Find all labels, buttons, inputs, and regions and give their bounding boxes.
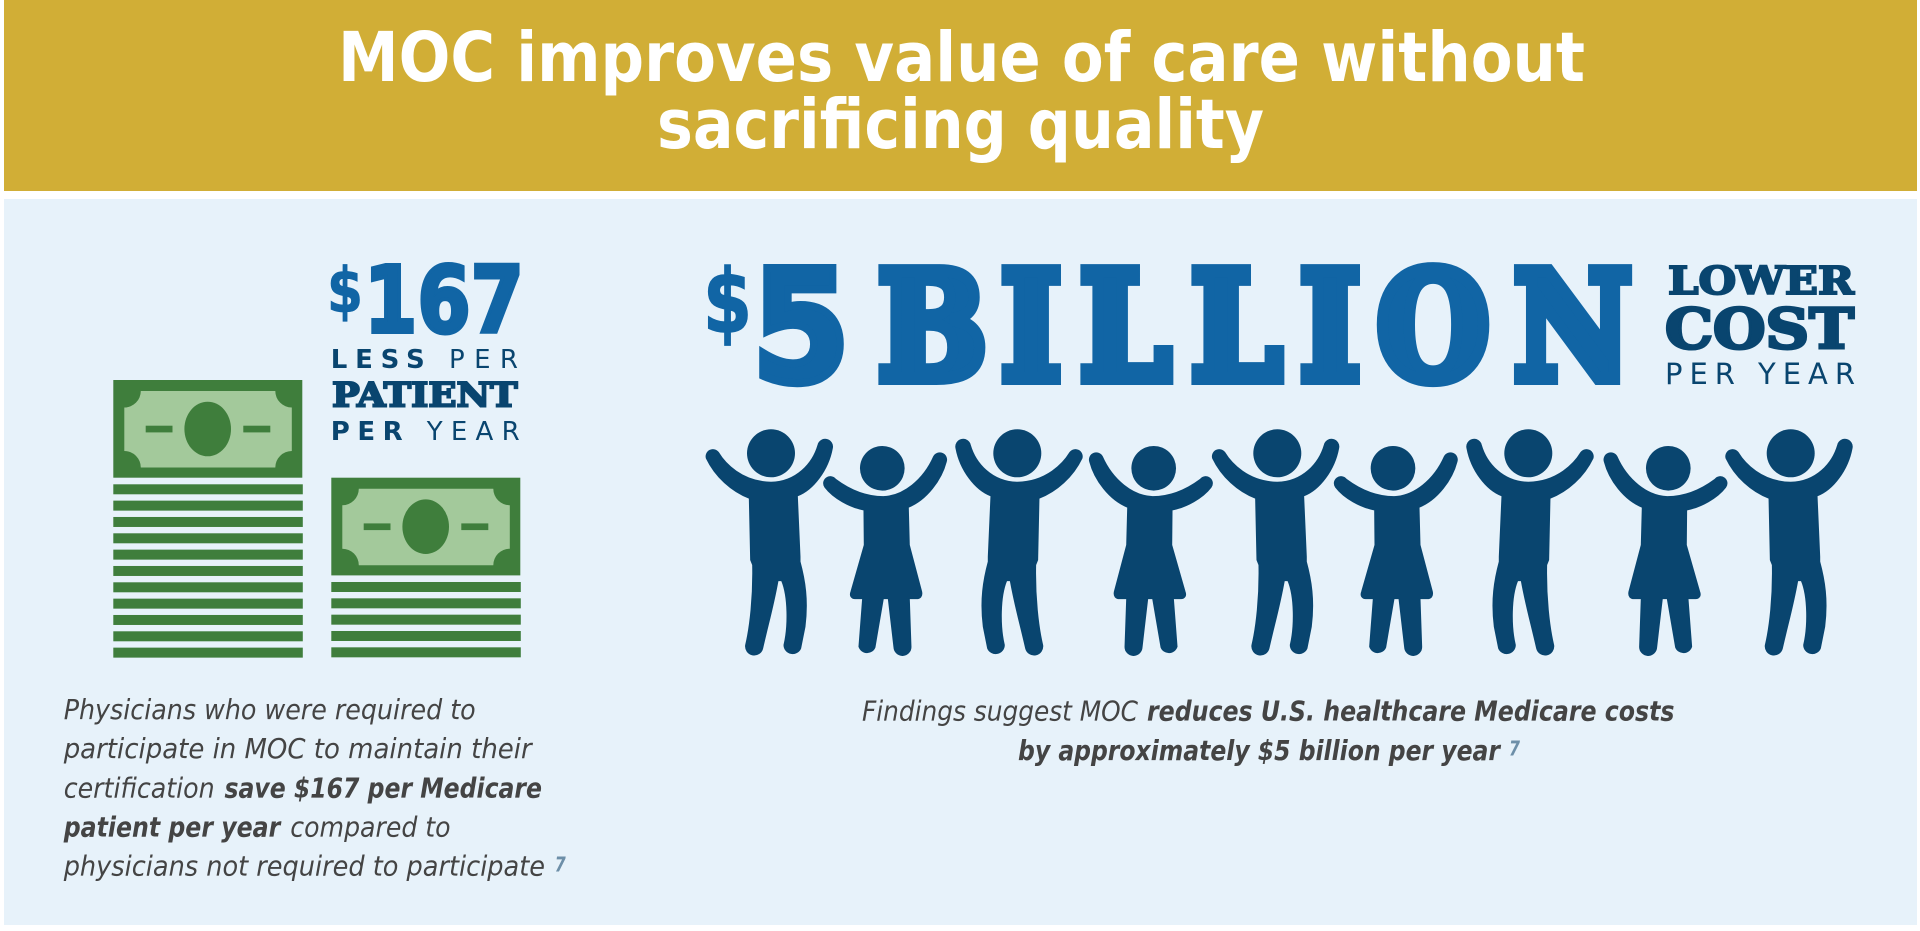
text block: physicians savings: participate in MOC to maintain their xyxy=(63,732,533,765)
stat: $5 billion: 5 xyxy=(752,237,850,418)
text block: Medicare costs finding: by approximately $5 billion per year xyxy=(1018,734,1502,767)
title: sacrificing quality xyxy=(657,85,1264,165)
text block: physicians savings xyxy=(63,693,566,882)
stat: lower cost per year: COST xyxy=(1665,296,1854,361)
stat: $167 less per patient per year: PATIENT xyxy=(332,376,518,416)
text block: physicians savings: Physicians who were required to xyxy=(64,693,476,726)
text block: Medicare costs finding: Findings suggest MOC xyxy=(862,694,1138,728)
stat: $167 less per patient per year: PER xyxy=(331,417,403,447)
stat: $167 less per patient per year: YEAR xyxy=(426,417,520,447)
title: MOC improves value of care without xyxy=(338,18,1585,98)
stat: $5 billion: $ xyxy=(703,250,752,353)
text block: physicians savings: 7 xyxy=(555,852,566,876)
stat: $167 less per patient per year: PER xyxy=(449,345,518,375)
icon: short money stack xyxy=(331,478,521,657)
icon: row of people xyxy=(706,429,1852,655)
title xyxy=(338,18,1585,165)
text block: Medicare costs finding: 7 xyxy=(1509,736,1520,760)
stat: $5 billion: BILLION xyxy=(878,240,1632,414)
text block: physicians savings: patient per year xyxy=(63,810,282,844)
stat: $167 less per patient per year: $ xyxy=(327,254,363,327)
text block: physicians savings: certification xyxy=(64,772,215,804)
stat: $167 less per patient per year: LESS xyxy=(331,345,425,375)
stat: lower cost per year: LOWER xyxy=(1668,258,1854,303)
stat: $167 less per patient per year: 167 xyxy=(364,247,524,354)
icon: tall money stack xyxy=(113,380,303,658)
text block: Medicare costs finding: reduces U.S. healthcare Medicare costs xyxy=(1147,694,1674,728)
stat: lower cost per year: PER YEAR xyxy=(1665,357,1855,391)
stat: $167 less per patient per year xyxy=(327,247,524,447)
text block: physicians savings: compared to xyxy=(290,810,451,844)
header banner xyxy=(4,0,1917,191)
text block: physicians savings: save $167 per Medicare xyxy=(224,772,542,804)
text block: physicians savings: physicians not required to participate xyxy=(63,850,545,882)
stat: lower cost per year xyxy=(1665,258,1855,391)
panel: content background xyxy=(4,199,1917,925)
text block: Medicare costs finding xyxy=(862,694,1674,767)
